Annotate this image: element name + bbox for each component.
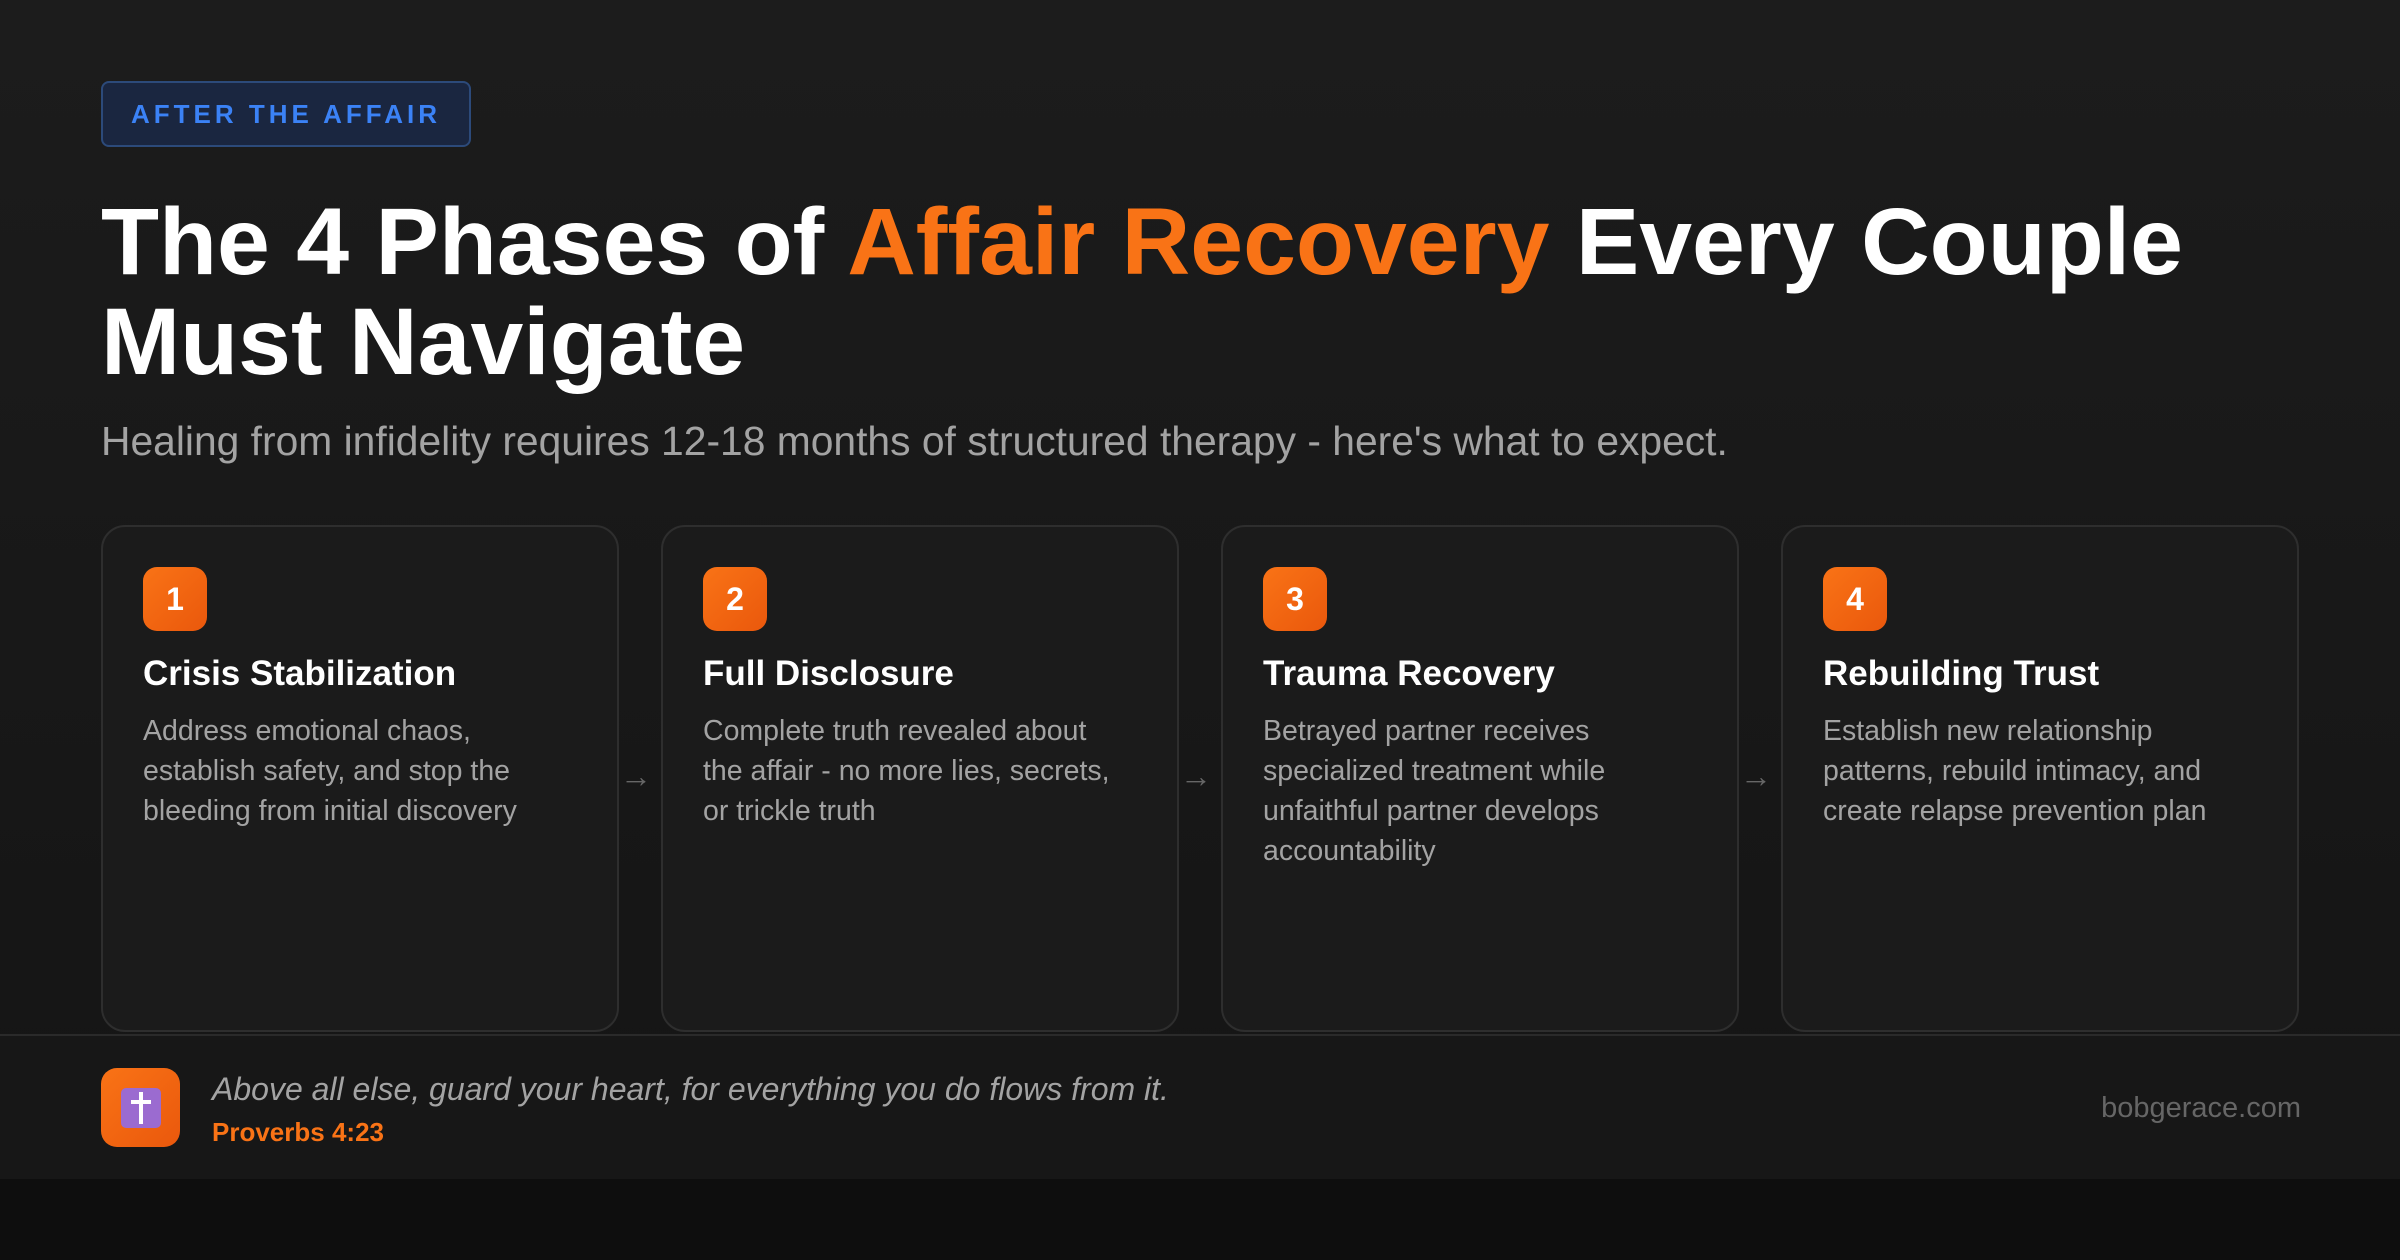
quote: Above all else, guard your heart, for everything you do flows from it. [212,1071,1169,1107]
arrow 3: → [1740,758,1772,794]
arrow 2: → [1180,758,1212,794]
badge 3: 3 [1286,580,1304,616]
title: The 4 Phases of Affair Recovery Every Couple [101,189,2183,295]
text: phase 4: Establish new relationship patterns, rebuild intimacy, and create relapse prevention plan [1823,715,2206,827]
quote reference: Proverbs 4:23 [212,1117,384,1147]
text: phase 2: Complete truth revealed about the affair - no more lies, secrets, or trickle truth [703,715,1110,827]
panel: phase 4 [1781,525,2299,1032]
badge 2: 2 [726,580,744,616]
icon: cross [101,1068,180,1147]
text: phase 3: Betrayed partner receives specialized treatment while unfaithful partner develops accountability [1263,715,1605,867]
text: phase 1: Address emotional chaos, establish safety, and stop the bleeding from initial discovery [143,715,517,827]
subtitle: Healing from infidelity requires 12-18 months of structured therapy - here's what to expect. [101,418,1728,464]
title [101,189,2183,395]
tag: after the affair: AFTER THE AFFAIR [131,98,441,128]
badge 3 [1263,567,1327,631]
badge 4 [1823,567,1887,631]
heading: rebuilding trust: Rebuilding Trust [1823,654,2099,693]
panel: phase 1 [101,525,619,1032]
footer bar [0,1034,2400,1179]
heading: trauma recovery: Trauma Recovery [1263,654,1555,693]
badge 2 [703,567,767,631]
panel: phase 3 [1221,525,1739,1032]
panel: phase 2 [661,525,1179,1032]
title: Must Navigate [101,289,745,395]
badge 1: 1 [166,580,184,616]
badge 4: 4 [1846,580,1864,616]
tag: after the affair [101,81,471,147]
badge 1 [143,567,207,631]
arrow 1: → [620,758,652,794]
website: bobgerace.com [2101,1092,2301,1124]
heading: full disclosure: Full Disclosure [703,654,954,693]
heading: crisis stabilization: Crisis Stabilization [143,654,456,693]
